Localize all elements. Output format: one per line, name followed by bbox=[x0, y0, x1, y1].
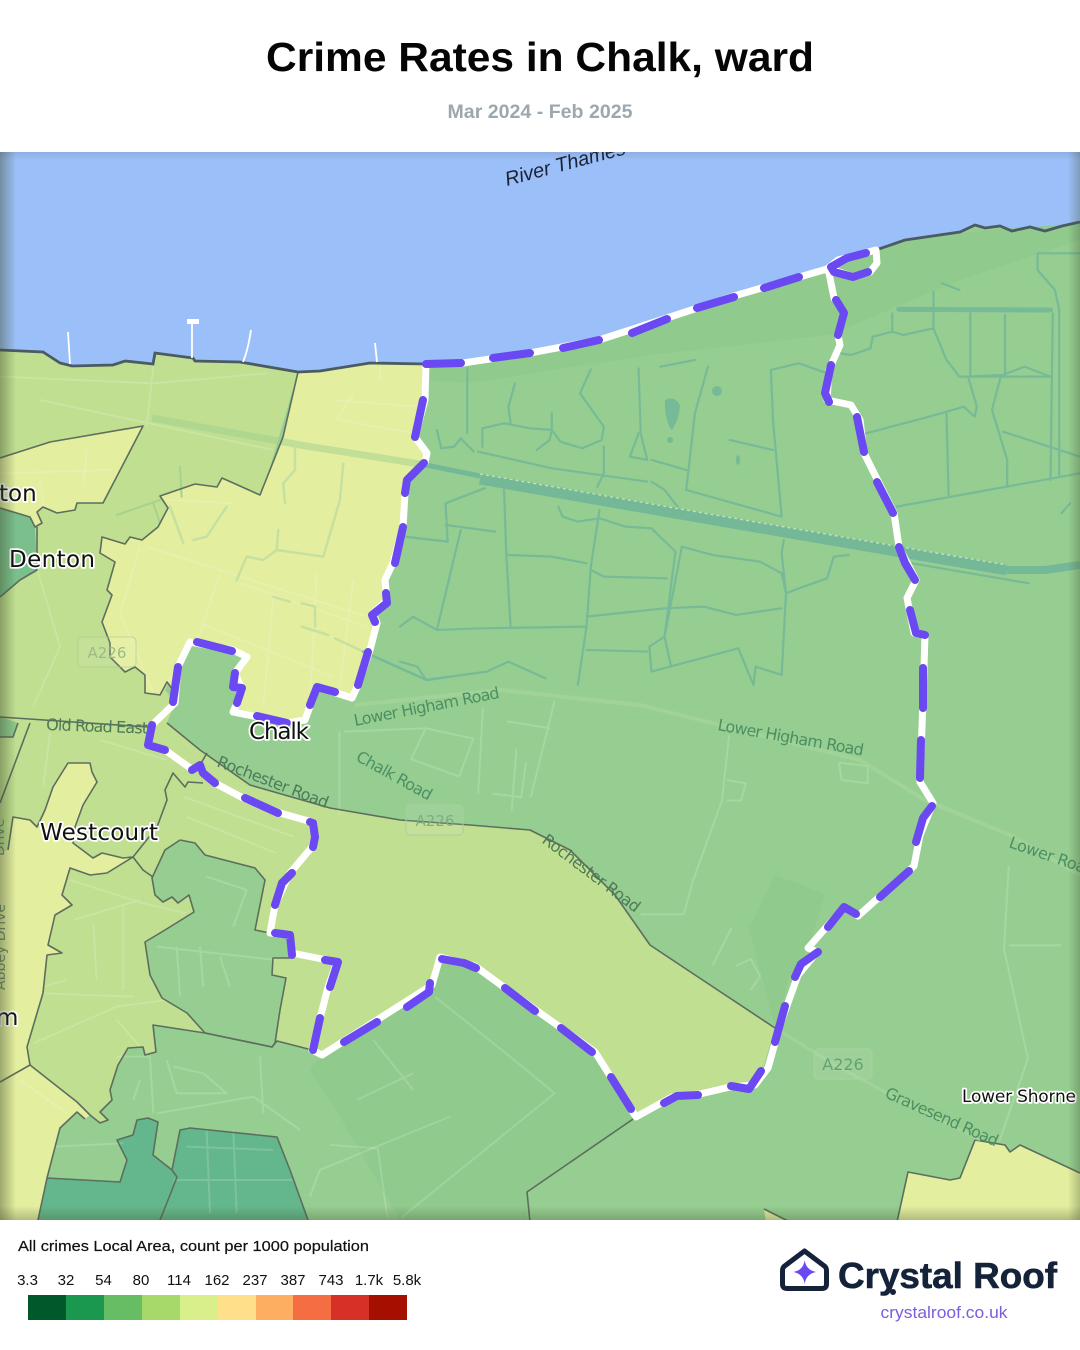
faint street network: west bbox=[0, 367, 417, 787]
darker coastal and wood patches bbox=[1010, 225, 1060, 230]
legend colour bar bbox=[28, 1295, 407, 1320]
legend values: 237 bbox=[242, 1272, 268, 1289]
title: Crime Rates in Chalk, ward bbox=[266, 34, 814, 80]
drainage ditches north bbox=[437, 253, 1080, 517]
brand name: Crystal Roof bbox=[838, 1255, 1058, 1296]
legend values: 54 bbox=[95, 1272, 112, 1289]
selected ward boundary: white underlay bbox=[148, 250, 933, 1117]
subtitle: date range: Mar 2024 - Feb 2025 bbox=[448, 102, 633, 123]
icon: house with star bbox=[782, 1251, 826, 1288]
road badge: A226 east bbox=[814, 1049, 872, 1079]
legend values: 5.8k bbox=[393, 1272, 422, 1289]
road labels bbox=[0, 683, 1080, 1150]
legend title: All crimes Local Area, count per 1000 population bbox=[18, 1238, 369, 1255]
place labels: ton bbox=[0, 481, 37, 507]
legend values: 387 bbox=[280, 1272, 306, 1289]
road labels: Rochester Road bbox=[539, 830, 644, 916]
area: green small west bbox=[0, 717, 18, 737]
brand url: crystalroof.co.uk bbox=[880, 1303, 1008, 1322]
road labels: Old Road East bbox=[46, 715, 148, 738]
road badge: A226 west: A226 bbox=[88, 644, 126, 662]
road labels: Lower Higham Road bbox=[716, 715, 865, 760]
place labels: Westcourt bbox=[40, 820, 158, 846]
area: yellow-green wards bbox=[0, 350, 775, 1123]
ward boundary lines bbox=[0, 372, 1080, 1222]
road labels: Lower Higham Road bbox=[352, 683, 501, 730]
water: River Thames bbox=[0, 152, 1080, 371]
selected ward boundary: purple dashes bbox=[148, 253, 932, 1109]
drainage ditches south bbox=[400, 488, 1029, 685]
road: Gravesend Road bbox=[775, 1028, 980, 1140]
road labels: Gravesend Road bbox=[882, 1083, 1002, 1150]
legend values: 162 bbox=[204, 1272, 230, 1289]
area: green west edge bbox=[0, 508, 37, 597]
legend values: 32 bbox=[58, 1272, 74, 1289]
faint street network: south west bbox=[20, 793, 450, 1213]
area: green estate bbox=[145, 840, 292, 1047]
piers in river bbox=[68, 319, 377, 364]
road badge: A226 centre: A226 bbox=[416, 812, 454, 830]
area: pale yellow south west bbox=[0, 1065, 90, 1220]
legend values: 114 bbox=[167, 1272, 191, 1289]
place labels bbox=[0, 481, 1076, 1107]
area: pale yellow south east bbox=[897, 1140, 1080, 1220]
legend values: 3.3 bbox=[17, 1272, 38, 1289]
brand logo bbox=[782, 1251, 1058, 1322]
legend values: 743 bbox=[318, 1272, 344, 1289]
area: pale yellow Denton north bbox=[0, 426, 143, 527]
road labels: Rochester Road bbox=[215, 752, 332, 812]
legend bbox=[17, 1238, 422, 1320]
legend values bbox=[17, 1272, 422, 1289]
area: pale yellow Chalk west bbox=[100, 363, 427, 723]
land base bbox=[0, 222, 1080, 1220]
railway line bbox=[426, 465, 1080, 570]
place labels: Lower Shorne bbox=[962, 1087, 1076, 1107]
legend values: 80 bbox=[133, 1272, 149, 1289]
road badge: A226 centre bbox=[406, 805, 463, 835]
area: Chalk north ward green wedge bbox=[167, 711, 172, 722]
road badge: A226 east: A226 bbox=[822, 1055, 864, 1074]
legend values: 1.7k bbox=[355, 1272, 384, 1289]
road: Lower Higham Road bbox=[355, 690, 1080, 875]
railway line pale west bbox=[152, 418, 426, 465]
faint street network: east bbox=[330, 701, 1061, 1217]
road labels: Chalk Road bbox=[353, 747, 436, 804]
area: pale yellow small bbox=[764, 1210, 784, 1220]
area: darker green estates bbox=[38, 1118, 308, 1220]
road badge: A226 west bbox=[78, 637, 136, 667]
place labels: Chalk bbox=[249, 719, 310, 745]
place labels: Denton bbox=[9, 547, 95, 573]
coastline bbox=[0, 222, 1080, 372]
ponds bbox=[665, 386, 740, 465]
area: pale yellow Westcourt strip bbox=[0, 763, 133, 1082]
ditches west of ward bbox=[117, 447, 450, 680]
label: River Thames: River Thames bbox=[503, 137, 628, 191]
map edge vignette bbox=[0, 152, 1080, 1220]
